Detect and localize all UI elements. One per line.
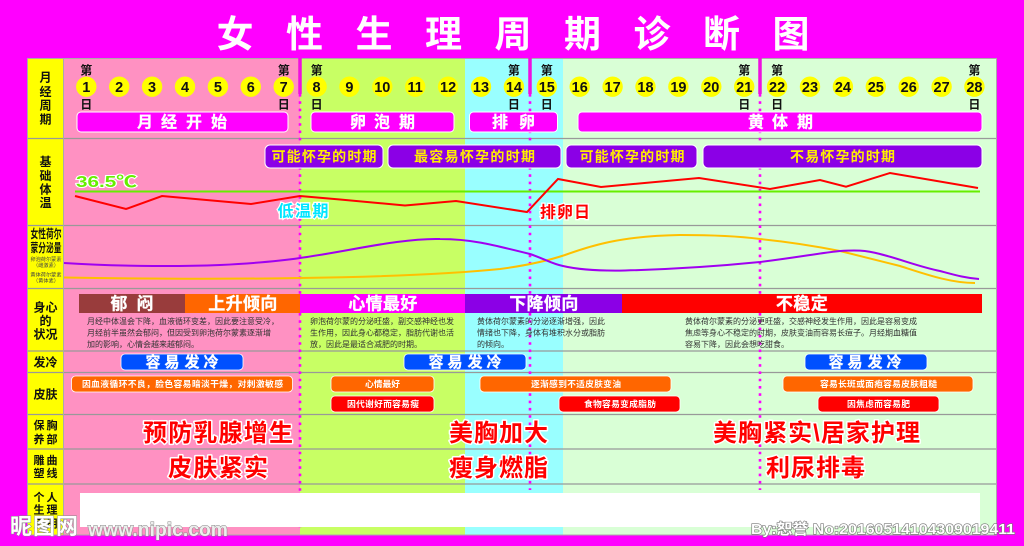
label: body shaping — [34, 453, 58, 480]
day numbers: 24 — [835, 80, 851, 96]
label: breast care — [34, 418, 58, 446]
body shaping text: 皮肤紧实 — [168, 455, 268, 482]
day numbers — [82, 80, 982, 96]
week markers: 日 — [508, 98, 520, 112]
label: skin: 皮肤 — [33, 386, 58, 402]
day numbers: 21 — [736, 80, 752, 96]
follicular hormone curve — [64, 239, 979, 279]
label: hormone secretion: 女性荷尔 — [30, 226, 62, 241]
day numbers: 16 — [572, 80, 588, 96]
day numbers: 1 — [82, 80, 90, 96]
week markers: 日 — [968, 98, 980, 112]
week markers: 日 — [771, 98, 783, 112]
week markers: 第 — [738, 62, 750, 78]
skin pills: 逐渐感到不适皮肤变油 — [531, 378, 621, 389]
label: body shaping: 雕曲 — [34, 453, 58, 467]
week markers: 第 — [311, 62, 323, 78]
label: mind and body: 身心 — [33, 300, 58, 314]
skin pills: 因代谢好而容易瘦 — [347, 398, 419, 409]
day numbers: 11 — [408, 80, 423, 96]
week markers: 日 — [541, 98, 553, 112]
skin pills: 食物容易变成脂肪 — [584, 398, 656, 409]
personal record box — [80, 493, 980, 527]
label: hormone secretion: （雌激素） — [33, 261, 59, 269]
week markers: 第 — [278, 62, 290, 78]
description: menstruation: 加的影响，心情会越来越郁闷。 — [87, 339, 199, 349]
day numbers: 6 — [247, 80, 255, 96]
day numbers: 5 — [214, 80, 222, 96]
week markers: 第 — [80, 62, 92, 78]
fertility pills — [265, 145, 982, 168]
label: breast care: 保胸 — [34, 418, 58, 432]
description: ovulation: 的倾向。 — [477, 339, 509, 349]
label: menstrual cycle: 月经周期 — [39, 70, 52, 126]
breast care text: 美胸紧实\居家护理 — [713, 420, 920, 447]
body shaping text: 瘦身燃脂 — [449, 455, 548, 482]
description: ovulation: 情绪也下降，身体有堆积水分或脂肪 — [477, 328, 605, 338]
fertility pills: 最容易怀孕的时期 — [414, 148, 535, 164]
description: follicular: 放，因此是最适合减肥的时期。 — [310, 339, 422, 349]
label: basal temperature: 基础体温 — [39, 154, 52, 210]
day numbers: 15 — [539, 80, 555, 96]
description: luteal: 黄体荷尔蒙素的分泌更旺盛，交感神经发生作用，因此是容易变成 — [685, 316, 917, 326]
day numbers: 9 — [345, 80, 353, 96]
skin pills: 心情最好 — [365, 378, 400, 389]
36.5 baseline label: 36.5℃ — [76, 174, 137, 191]
day numbers: 27 — [934, 80, 950, 96]
label: mind and body: 状况 — [33, 326, 58, 342]
day numbers: 22 — [769, 80, 785, 96]
phase pills: 月经开始 — [137, 114, 227, 132]
description: menstruation — [87, 316, 279, 349]
phase pills: 黄体期 — [748, 114, 813, 132]
breast care text — [143, 420, 920, 447]
luteal hormone curve — [64, 235, 975, 283]
label: hormone secretion: （黄体素） — [33, 276, 59, 284]
description: luteal: 焦虑等身心不稳定的时期，皮肤变油而容易长痘子。月经期血糖值 — [685, 328, 917, 338]
day numbers: 13 — [473, 80, 489, 96]
temperature line — [75, 173, 978, 212]
day numbers: 3 — [148, 80, 156, 96]
mood bars — [79, 294, 982, 314]
description: luteal: 容易下降，因此会想吃甜食。 — [685, 339, 789, 349]
description: menstruation: 月经前半虽然会郁闷，但因受到卵泡荷尔蒙素逐渐增 — [87, 328, 271, 338]
skin pills: 因焦虑而容易肥 — [847, 398, 910, 409]
description: ovulation — [477, 316, 605, 349]
day numbers: 26 — [901, 80, 917, 96]
watermark: site: 昵图网 — [10, 514, 78, 539]
low temperature label: 低温期 — [278, 202, 328, 220]
day numbers: 10 — [374, 80, 390, 96]
mood bars: 郁闷 — [110, 294, 154, 314]
label: hormone secretion: 蒙分泌量 — [30, 240, 62, 255]
description: follicular — [310, 316, 454, 349]
label: hormone secretion: 黄体荷尔蒙素 — [30, 270, 62, 278]
week markers: 日 — [278, 98, 290, 112]
day numbers: 23 — [802, 80, 818, 96]
label: personal record: 生理 — [34, 502, 58, 516]
phase pills: 卵泡期 — [350, 113, 415, 132]
fertility pills: 不易怀孕的时期 — [790, 148, 895, 164]
day circles — [76, 76, 985, 97]
label: hormone secretion — [30, 226, 62, 284]
description: ovulation: 黄体荷尔蒙素的分泌逐渐增强，因此 — [477, 316, 605, 326]
skin pills — [72, 376, 973, 412]
day numbers: 7 — [280, 80, 288, 96]
label: personal record: 个人 — [34, 491, 58, 504]
week markers: 第 — [508, 62, 520, 78]
label: mind and body — [33, 300, 58, 342]
day numbers: 18 — [637, 80, 654, 96]
skin pills: 因血液循环不良，脸色容易暗淡干燥，对刺激敏感 — [82, 378, 283, 389]
fertility pills: 可能怀孕的时期 — [580, 148, 684, 164]
week markers: 日 — [311, 98, 323, 112]
label: hormone secretion: 卵泡荷尔蒙素 — [30, 255, 62, 263]
fertility pills: 可能怀孕的时期 — [272, 148, 376, 164]
week markers: 第 — [541, 62, 553, 78]
label: breast care: 养部 — [34, 432, 58, 446]
watermark: site: www.nipic.com — [87, 520, 228, 541]
day numbers: 28 — [966, 80, 982, 96]
day numbers: 12 — [440, 80, 456, 96]
day numbers: 17 — [605, 80, 621, 96]
day numbers: 20 — [703, 80, 719, 96]
chills pills — [121, 353, 927, 371]
mood bars: 心情最好 — [348, 294, 418, 314]
day numbers: 2 — [115, 80, 123, 96]
breast care text: 预防乳腺增生 — [143, 420, 293, 447]
description: menstruation: 月经中体温会下降，血液循环变差，因此要注意受冷， — [87, 316, 279, 326]
breast care text: 美胸加大 — [449, 420, 548, 447]
day numbers: 14 — [506, 80, 522, 96]
week markers: 日 — [738, 98, 750, 112]
mood bars: 下降倾向 — [509, 294, 579, 314]
week markers: 日 — [80, 98, 92, 112]
description: follicular: 卵泡荷尔蒙的分泌旺盛，副交感神经也发 — [310, 316, 454, 326]
chills pills: 容易发冷 — [428, 353, 502, 371]
day numbers: 25 — [868, 80, 884, 96]
body shaping text — [168, 455, 865, 482]
week markers — [80, 62, 980, 112]
label: body shaping: 塑线 — [34, 466, 58, 480]
label: chills: 发冷 — [33, 354, 58, 370]
week markers: 第 — [968, 62, 980, 78]
hormone curves — [64, 235, 979, 283]
chills pills: 容易发冷 — [828, 353, 902, 371]
phase pills: 排卵 — [492, 113, 535, 132]
label: mind and body: 的 — [39, 313, 52, 328]
phase pills — [77, 112, 982, 132]
baseline — [75, 190, 980, 192]
chills pills: 容易发冷 — [145, 353, 219, 371]
body shaping text: 利尿排毒 — [766, 455, 865, 482]
ovulation day label: 排卵日 — [540, 202, 590, 222]
watermark: author number: By:恕誉 No:20160514104309019411 — [751, 521, 1015, 538]
watermark: site — [10, 514, 228, 541]
description: luteal — [685, 316, 917, 349]
day numbers: 19 — [670, 80, 686, 96]
week markers: 第 — [771, 62, 783, 78]
temperature chart — [75, 173, 980, 222]
description: follicular: 生作用，因此身心都稳定，脂肪代谢也活 — [310, 328, 454, 338]
label: personal record — [34, 491, 58, 530]
label: personal record: 周期 — [34, 516, 58, 530]
title: 女性生理周期诊断图 — [216, 14, 810, 55]
skin pills: 容易长斑或面疱容易皮肤粗糙 — [820, 378, 937, 389]
mood bars: 不稳定 — [776, 294, 828, 314]
day numbers: 4 — [181, 80, 189, 96]
mood bars: 上升倾向 — [208, 294, 278, 314]
row labels — [30, 70, 62, 530]
day numbers: 8 — [313, 80, 321, 96]
